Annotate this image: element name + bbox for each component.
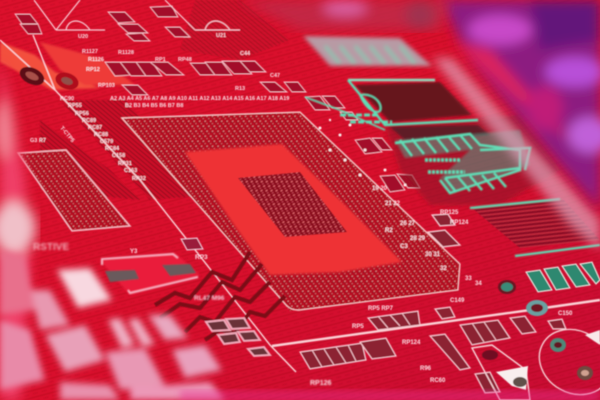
silkscreen labels, upper left: RP55 (68, 103, 82, 109)
silkscreen labels, upper left: B2 B3 B4 B5 B6 B7 B8 (125, 103, 183, 109)
silkscreen labels, lower right: RP126 (310, 380, 332, 387)
small component RP3 (130, 238, 208, 261)
silkscreen labels, lower right: 28 29 (410, 236, 426, 242)
silkscreen labels, upper left: RP56 (75, 111, 89, 117)
silkscreen labels, upper left: R1128 (118, 50, 134, 56)
silkscreen labels, lower right: 26 27 (400, 221, 416, 227)
blurred purple background, top right (440, 0, 600, 210)
bottom magenta fade (180, 390, 600, 400)
silkscreen labels, lower right: R96 (420, 366, 432, 372)
silkscreen labels, lower right (310, 186, 573, 387)
long white line, lower right (272, 300, 600, 346)
silkscreen labels, lower right: 30 31 (425, 252, 441, 258)
silkscreen labels, upper left: RP103 (98, 83, 115, 89)
teal traces (305, 80, 600, 256)
silkscreen labels, upper left: RP1 (155, 57, 166, 63)
silkscreen labels, upper left: RC88 (94, 132, 108, 138)
silkscreen labels, lower right: RP124 (402, 340, 421, 346)
blurred top band (240, 0, 450, 30)
long diagonal silkscreen lines (0, 35, 296, 372)
small component RP3: RP3 (195, 254, 208, 261)
footprint outline (122, 112, 460, 310)
silkscreen divisions on pads (312, 313, 496, 367)
central chip via block (238, 172, 347, 237)
blurred right edge strip (432, 58, 600, 250)
lower right teal pad row (526, 262, 600, 292)
small component RP3: Y3 (130, 249, 138, 255)
silkscreen labels, upper left: T-CTP5 (58, 125, 75, 144)
silkscreen labels, lower right: C3 (400, 244, 408, 250)
component outline with dark pads (102, 254, 198, 293)
silkscreen labels, lower right: 19 20 (372, 186, 388, 192)
silkscreen labels, lower right: R2 (385, 228, 393, 234)
dark strip below panel (390, 125, 490, 140)
silkscreen labels, upper left: C44 (240, 51, 251, 57)
silkscreen labels, lower right: 21 22 (385, 201, 401, 207)
silkscreen labels, upper left: C47 (270, 73, 280, 79)
bright red pad, lower left (100, 253, 200, 295)
silkscreen labels, upper left: RC90 (60, 96, 74, 102)
silkscreen labels, upper left: RC89 (82, 118, 96, 124)
silkscreen labels, upper left: C579 (100, 139, 113, 145)
silkscreen labels, upper left: C163 (124, 168, 137, 174)
central orange pad (185, 144, 402, 275)
silkscreen labels, upper left: R1127 (82, 49, 98, 55)
silkscreen labels, upper left: U20 (78, 34, 88, 40)
blurred foreground, left edge (0, 60, 36, 400)
mounting holes, upper left (17, 63, 81, 93)
silkscreen labels, upper left: RP48 (178, 57, 192, 63)
upper arcs (34, 0, 240, 30)
silkscreen labels, lower right: 32 (440, 266, 447, 272)
silkscreen labels, upper left: RC84 (105, 146, 120, 152)
silkscreen labels, upper left: R13 (235, 86, 245, 92)
white silkscreen dots near chip edge (318, 119, 406, 186)
silkscreen labels, lower right: C150 (558, 311, 573, 317)
bottom row of pads (300, 214, 566, 393)
silkscreen labels, upper left: RP12 (86, 67, 100, 73)
silkscreen labels, upper left: RP31 (118, 161, 132, 167)
left via block (18, 150, 130, 231)
silkscreen labels, upper left: RC87 (88, 125, 102, 131)
silkscreen labels, lower right: RP124 (450, 220, 469, 226)
blurred teal row, top (303, 36, 432, 66)
dark maroon panel, top right (355, 82, 472, 122)
component circle and white pad, lower right (472, 317, 600, 400)
silkscreen labels, upper left: U21 (216, 33, 226, 39)
orange copper area, upper left (0, 42, 135, 90)
silkscreen labels, upper left: R1126 (88, 57, 104, 63)
right side dark trace section (472, 198, 600, 248)
blurred text, lower left: RSTIVE (33, 242, 69, 253)
silkscreen labels, upper left (30, 33, 289, 182)
silkscreen labels, lower right: RC60 (430, 378, 446, 384)
traces, upper left (40, 120, 140, 200)
silkscreen labels, lower right: RP5 RP7 (368, 306, 394, 312)
silkscreen labels, lower right: RP5 (352, 324, 364, 330)
silkscreen pads, top rows (15, 6, 420, 192)
silkscreen labels, upper left: C158 (112, 153, 125, 159)
dark red board behind teal traces (385, 115, 560, 205)
silkscreen labels, upper left: G3 R7 (30, 138, 46, 144)
silkscreen labels, lower right: RP125 (440, 210, 459, 216)
teal vias (498, 280, 593, 380)
small chip array, lower centre (206, 318, 270, 356)
silkscreen labels, lower right: 33 (465, 276, 472, 282)
label block, lower centre: RL47 M96 (194, 295, 225, 302)
silkscreen labels, lower right: 34 (475, 281, 482, 287)
silkscreen labels, upper left: RP32 (132, 176, 146, 182)
teal pads behind traces (395, 130, 530, 193)
silkscreen labels, lower right: C149 (450, 298, 465, 304)
central chip footprint, via field (122, 112, 460, 311)
dark zigzag traces, lower centre (155, 252, 285, 340)
blurred foreground chips, bottom left (0, 250, 225, 400)
silkscreen labels, upper left: A2 A3 A4 A5 A6 A7 A8 A9 A10 A11 A12 A13 A14 A15 A16 A17 A18 A19 (110, 96, 289, 102)
